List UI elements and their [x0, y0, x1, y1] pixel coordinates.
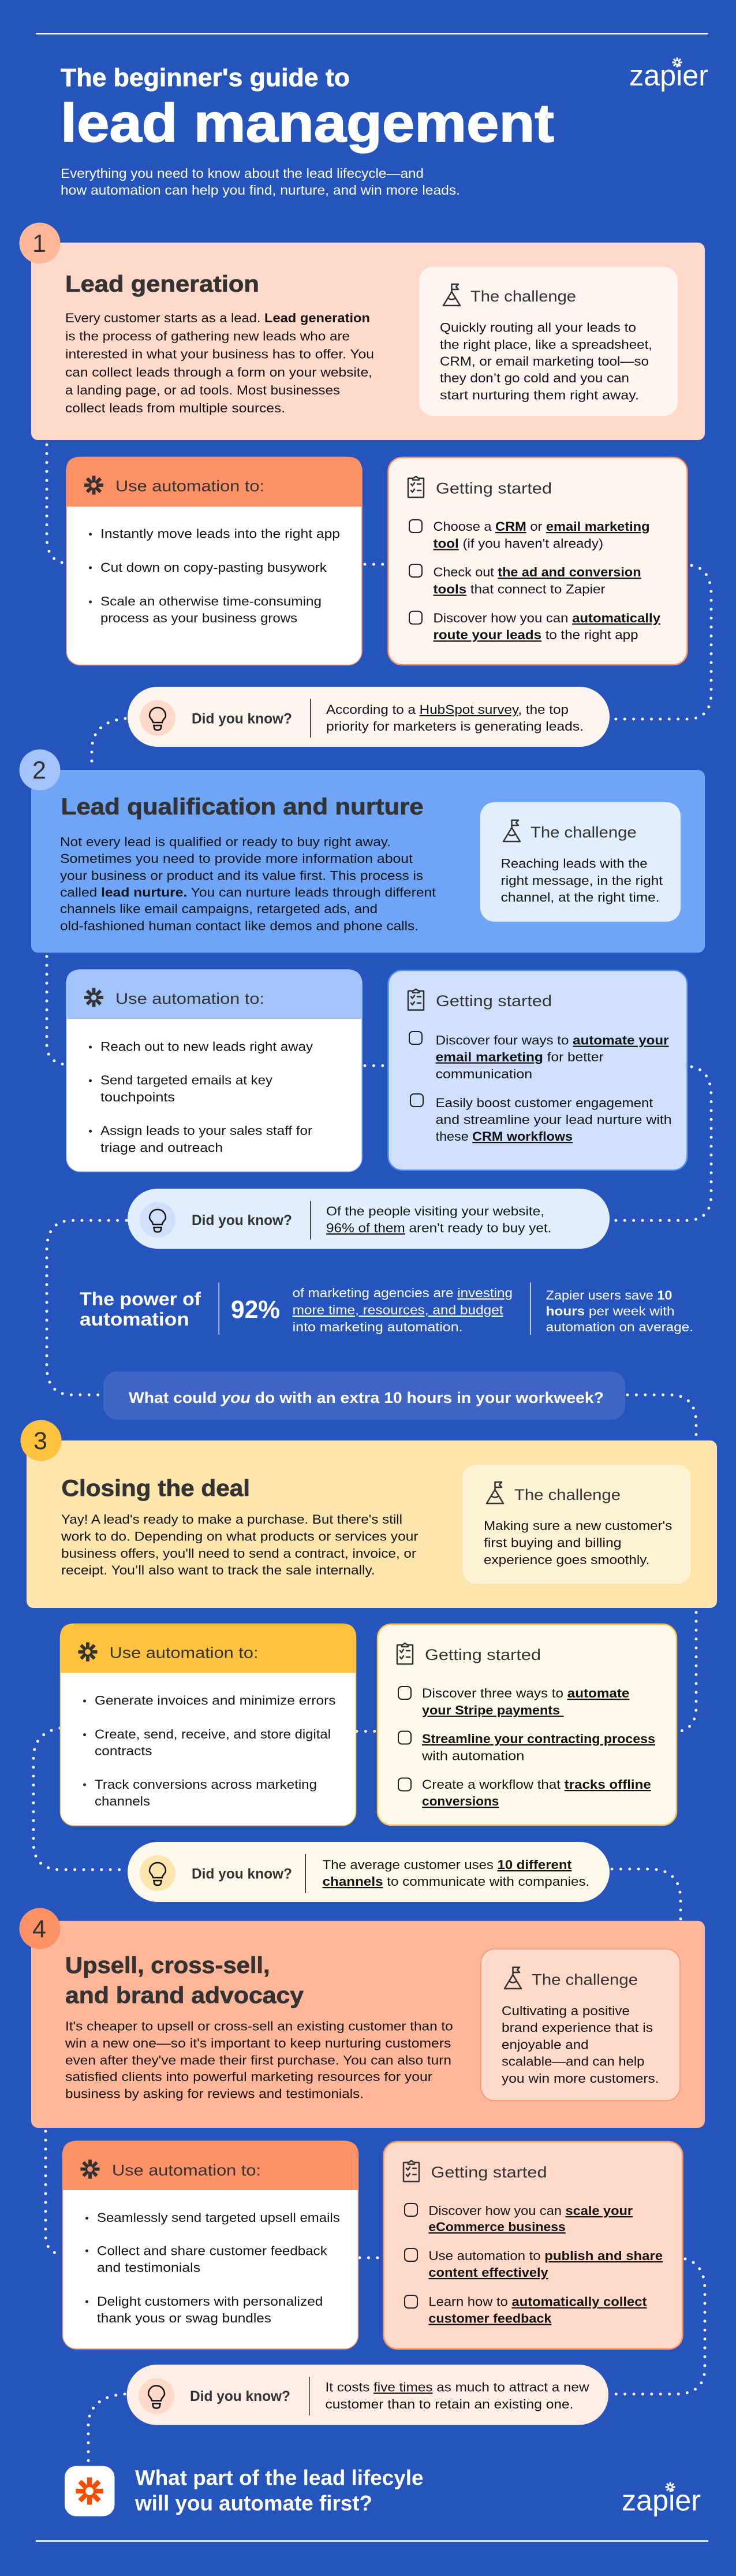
bullet list: contracts	[95, 1744, 152, 1758]
fact	[326, 1204, 551, 1235]
closing question: will you automate first?	[135, 2492, 372, 2515]
checklist: Choose a CRM or email marketing	[433, 519, 650, 534]
challenge text: start nurturing them right away.	[440, 388, 639, 402]
challenge text: they don’t go cold and you can	[440, 371, 629, 385]
stat description: more time, resources, and budget	[293, 1303, 503, 1317]
subtitle: Everything you need to know about the lead lifecycle—and	[61, 166, 424, 181]
stats heading: The power of	[80, 1289, 201, 1309]
fact: channels to communicate with companies.	[323, 1874, 589, 1889]
bullet list: Cut down on copy-pasting busywork	[100, 560, 327, 575]
checklist: with automation	[421, 1749, 524, 1763]
label: Did you know?	[192, 1866, 292, 1882]
step number 2	[20, 750, 60, 790]
challenge text: first buying and billing	[484, 1536, 622, 1550]
challenge title: The challenge	[532, 1971, 638, 1989]
label: Did you know?	[190, 2388, 290, 2404]
challenge text: you win more customers.	[502, 2071, 659, 2086]
top rule	[36, 33, 708, 35]
step number 3: 3	[33, 1427, 47, 1455]
body text: collect leads from multiple sources.	[65, 401, 285, 415]
checklist: tool (if you haven't already)	[433, 536, 603, 551]
step number 4	[20, 1908, 60, 1949]
did you know pill 4	[127, 2365, 608, 2425]
stat: 10 hours: hours per week with	[546, 1304, 674, 1319]
card title: Use automation to:	[112, 2161, 261, 2179]
body text: called lead nurture. You can nurture leads through different	[60, 885, 436, 899]
bullet list: channels	[95, 1794, 150, 1808]
bullet list	[89, 1040, 313, 1155]
dotted connector: automation card to getting started	[360, 2256, 379, 2259]
dotted connector: automation card to getting started	[365, 563, 386, 566]
closing section	[65, 2466, 701, 2517]
label: Did you know?	[192, 1212, 292, 1229]
icon: light bulb	[140, 1855, 175, 1891]
body text: business offers, you'll need to send a contract, invoice, or	[61, 1546, 416, 1561]
challenge card	[419, 267, 678, 416]
body text: business by asking for reviews and testimonials.	[65, 2087, 364, 2101]
challenge card	[480, 802, 681, 922]
step number 1: 1	[32, 230, 46, 258]
bullet list: process as your business grows	[100, 611, 297, 625]
checklist: Streamline your contracting process	[422, 1732, 655, 1746]
bullet list: Reach out to new leads right away	[100, 1040, 313, 1054]
stat: 10 hours: automation on average.	[546, 1320, 693, 1334]
bullet list: thank yous or swag bundles	[97, 2311, 271, 2325]
body text: channels like email campaigns, retargeted ads, and	[60, 902, 378, 916]
card title: Use automation to:	[115, 990, 264, 1007]
heading: Upsell, cross-sell,	[65, 1953, 270, 1978]
icon: clipboard	[397, 1643, 413, 1664]
heading: Lead generation	[65, 271, 259, 297]
panel: getting started (upsell)	[383, 2142, 682, 2349]
stat: 10 hours	[546, 1288, 693, 1334]
panel: lead generation	[20, 223, 705, 440]
challenge text: enjoyable and	[502, 2037, 589, 2052]
body text: win a new one—so it's important to keep nurturing customers	[65, 2036, 451, 2050]
challenge text	[502, 2004, 659, 2086]
icon: zapier app tile	[65, 2466, 114, 2516]
dotted connector: pill to panel 4	[612, 1869, 681, 1921]
body text: Every customer starts as a lead. Lead generation	[65, 311, 370, 325]
body text: satisfied clients into powerful marketing resources for your	[65, 2069, 432, 2084]
dotted connector: automation card to getting started	[357, 1730, 376, 1733]
stat description: of marketing agencies are investing	[293, 1286, 513, 1300]
challenge text: brand experience that is	[502, 2020, 653, 2035]
body text	[65, 2019, 453, 2101]
panel: upsell, cross-sell, and brand advocacy	[20, 1908, 705, 2128]
body text	[65, 311, 374, 415]
label: Did you know?	[192, 710, 292, 727]
dotted connector: pill to closing icon	[88, 2394, 125, 2465]
dotted connector: panel 2 to automation card	[47, 956, 66, 1064]
panel: getting started (closing)	[378, 1624, 677, 1825]
body text: Not every lead is qualified or ready to buy right away.	[60, 835, 391, 849]
icon: zapier asterisk	[78, 1642, 98, 1662]
challenge title: The challenge	[530, 824, 637, 841]
checklist	[409, 519, 661, 642]
bullet list: Delight customers with personalized	[97, 2294, 323, 2309]
bullet list: Create, send, receive, and store digital	[95, 1727, 331, 1741]
icon: flag on mountain	[503, 820, 520, 842]
heading	[65, 1953, 304, 2008]
fact: The average customer uses 10 different	[323, 1857, 572, 1872]
checklist: Learn how to automatically collect	[428, 2295, 647, 2309]
stat: 10 hours: Zapier users save 10	[546, 1288, 672, 1302]
checklist: and streamline your lead nurture with	[436, 1112, 672, 1127]
dotted connector: getting started to pill	[612, 565, 711, 719]
bullet list: Scale an otherwise time-consuming	[100, 594, 322, 609]
fact	[326, 2380, 589, 2411]
bullet list	[85, 2210, 340, 2325]
challenge text: right message, in the right	[501, 873, 663, 888]
challenge title: The challenge	[514, 1486, 621, 1503]
callout: extra 10 hours: What could you do with an extra 10 hours in your workweek?	[129, 1389, 604, 1406]
body text: can collect leads through a form on your website,	[65, 365, 372, 379]
heading: Closing the deal	[61, 1476, 250, 1501]
checklist: tools that connect to Zapier	[433, 582, 605, 597]
body text	[61, 1512, 419, 1577]
dotted connector: pill to panel 2	[92, 719, 125, 765]
icon: light bulb	[139, 2378, 174, 2414]
checklist: content effectively	[428, 2265, 549, 2280]
challenge text: the right place, like a spreadsheet,	[440, 337, 652, 352]
closing question: What part of the lead lifecyle	[135, 2466, 424, 2490]
bullet list: Instantly move leads into the right app	[100, 527, 340, 541]
challenge text: Making sure a new customer's	[484, 1518, 672, 1533]
challenge card	[481, 1949, 680, 2101]
panel: getting started (lead generation)	[388, 457, 687, 665]
panel: closing the deal	[21, 1420, 717, 1608]
challenge text	[440, 320, 652, 402]
body text: It's cheaper to upsell or cross-sell an existing customer than to	[65, 2019, 453, 2034]
checklist	[398, 1686, 655, 1808]
challenge text: CRM, or email marketing tool—so	[440, 354, 649, 368]
icon: clipboard	[408, 477, 424, 497]
checklist: conversions	[422, 1794, 499, 1808]
card title: Use automation to:	[110, 1644, 259, 1661]
body text: work to do. Depending on what products or services your	[61, 1529, 419, 1544]
panel: use automation (lead generation)	[66, 457, 362, 665]
stats heading	[80, 1289, 201, 1330]
challenge text: Quickly routing all your leads to	[440, 320, 636, 335]
bullet list	[83, 1693, 335, 1808]
challenge text	[484, 1518, 672, 1567]
step number 1	[20, 223, 60, 263]
icon: zapier asterisk	[84, 475, 103, 495]
header	[61, 58, 708, 198]
bullet list: Generate invoices and minimize errors	[95, 1693, 335, 1708]
icon: zapier asterisk	[84, 988, 103, 1007]
checklist: Discover how you can automatically	[433, 611, 661, 625]
bullet list: triage and outreach	[100, 1141, 223, 1155]
body text: your business or product and its value first. This process is	[60, 869, 423, 883]
dotted connector: automation card to pill	[33, 1728, 125, 1870]
challenge text: Reaching leads with the	[501, 857, 648, 871]
panel: use automation (qualification)	[66, 970, 362, 1171]
fact	[326, 702, 584, 734]
bullet list: Assign leads to your sales staff for	[100, 1123, 312, 1138]
challenge title: The challenge	[470, 288, 576, 305]
card title: Getting started	[425, 1646, 541, 1663]
checklist: Check out the ad and conversion	[433, 565, 641, 579]
bullet list: Seamlessly send targeted upsell emails	[97, 2210, 340, 2225]
icon: flag on mountain	[443, 284, 460, 306]
bullet list: Collect and share customer feedback	[97, 2243, 328, 2258]
subtitle: how automation can help you find, nurture, and win more leads.	[61, 183, 460, 198]
bullet list: and testimonials	[97, 2261, 200, 2275]
card title: Use automation to:	[115, 477, 264, 494]
fact: Of the people visiting your website,	[326, 1204, 544, 1219]
body text: a landing page, or ad tools. Most businesses	[65, 383, 340, 397]
heading: Lead qualification and nurture	[61, 794, 424, 820]
fact: priority for marketers is generating leads.	[326, 719, 584, 734]
panel: use automation (upsell)	[62, 2141, 358, 2349]
checklist: route your leads to the right app	[433, 628, 638, 642]
dotted connector: pill to callout	[47, 1220, 126, 1395]
panel: getting started (qualification)	[388, 970, 687, 1170]
checklist: eCommerce business	[428, 2220, 566, 2234]
stats band: the power of automation	[80, 1282, 693, 1335]
fact: According to a HubSpot survey , the top	[326, 702, 569, 717]
bullet list: Track conversions across marketing	[95, 1777, 317, 1792]
checklist: Create a workflow that tracks offline	[422, 1777, 651, 1792]
bullet list	[89, 527, 340, 625]
checklist: your Stripe payments	[422, 1703, 564, 1718]
panel: lead qualification and nurture	[20, 750, 705, 953]
step number 3	[21, 1420, 61, 1461]
body text: is the process of gathering new leads who are	[65, 329, 350, 343]
checklist: these CRM workflows	[436, 1129, 573, 1144]
icon: flag on mountain	[487, 1482, 503, 1503]
fact: customer than to retain an existing one.	[326, 2397, 574, 2411]
body text: receipt. You’ll also want to track the sale internally.	[61, 1563, 375, 1577]
checklist: email marketing for better	[436, 1049, 604, 1064]
body text: Yay! A lead's ready to make a purchase. But there's still	[61, 1512, 402, 1527]
did you know pill 3	[128, 1842, 610, 1902]
body text: interested in what your business has to offer. You	[65, 347, 374, 362]
dotted connector: getting started to pill	[613, 2259, 705, 2394]
checklist: Discover how you can scale your	[428, 2203, 633, 2218]
challenge text: channel, at the right time.	[501, 890, 660, 904]
logo: zapier: zapier	[629, 59, 708, 92]
heading: and brand advocacy	[65, 1983, 304, 2008]
challenge text: scalable—and can help	[502, 2054, 644, 2069]
title line 2: lead management	[61, 92, 554, 153]
body text: even after they've made their first purchase. You can also turn	[65, 2053, 451, 2067]
bullet list: Send targeted emails at key	[100, 1073, 272, 1088]
card title: Getting started	[431, 2164, 547, 2181]
callout: extra 10 hours	[103, 1372, 625, 1420]
title line 1: The beginner's guide to	[61, 64, 350, 92]
panel: use automation (closing)	[60, 1624, 356, 1826]
fact	[323, 1857, 589, 1889]
bottom rule	[36, 2540, 708, 2542]
card title: Getting started	[436, 479, 552, 497]
stat description: into marketing automation.	[293, 1320, 463, 1334]
icon: clipboard	[404, 2161, 419, 2182]
challenge text: experience goes smoothly.	[484, 1553, 649, 1567]
closing question	[135, 2466, 424, 2515]
icon: light bulb	[140, 1202, 175, 1238]
challenge text	[501, 857, 663, 904]
checklist: customer feedback	[428, 2311, 552, 2325]
challenge card	[462, 1464, 692, 1584]
stat: 92%: 92%	[231, 1296, 280, 1324]
stat description	[293, 1286, 513, 1334]
checklist: Use automation to publish and share	[428, 2249, 663, 2263]
fact: It costs five times as much to attract a new	[326, 2380, 589, 2395]
subtitle	[61, 166, 460, 198]
logo: zapier: zapier	[622, 2484, 701, 2517]
icon: light bulb	[140, 700, 175, 736]
bullet list: touchpoints	[100, 1090, 175, 1104]
stats heading: automation	[80, 1309, 189, 1330]
checklist: Discover three ways to automate	[422, 1686, 629, 1700]
did you know pill 1	[128, 687, 610, 747]
checklist: Discover four ways to automate your	[436, 1033, 669, 1048]
step number 4: 4	[32, 1915, 46, 1943]
icon: flag on mountain	[505, 1967, 521, 1989]
challenge text: Cultivating a positive	[502, 2004, 630, 2018]
body text: Sometimes you need to provide more information about	[60, 851, 413, 866]
dotted connector: panel 4 to automation card	[46, 2131, 61, 2254]
checklist: Easily boost customer engagement	[436, 1096, 653, 1110]
fact: 96% of them aren't ready to buy yet.	[326, 1220, 551, 1235]
body text: old-fashioned human contact like demos and phone calls.	[60, 919, 419, 933]
dotted connector: callout to panel 3	[627, 1395, 696, 1732]
icon: clipboard	[408, 989, 424, 1010]
body text	[60, 835, 436, 933]
dotted connector: automation card to getting started	[365, 1064, 386, 1067]
card title: Getting started	[436, 992, 552, 1010]
dotted connector: panel 1 to automation card	[47, 445, 66, 563]
checklist: communication	[436, 1067, 532, 1081]
dotted connector: getting started to pill	[612, 1067, 711, 1220]
step number 2: 2	[32, 757, 46, 784]
checklist	[405, 2203, 663, 2325]
did you know pill 2	[128, 1189, 610, 1249]
icon: zapier asterisk	[80, 2160, 100, 2179]
checklist	[409, 1032, 672, 1144]
